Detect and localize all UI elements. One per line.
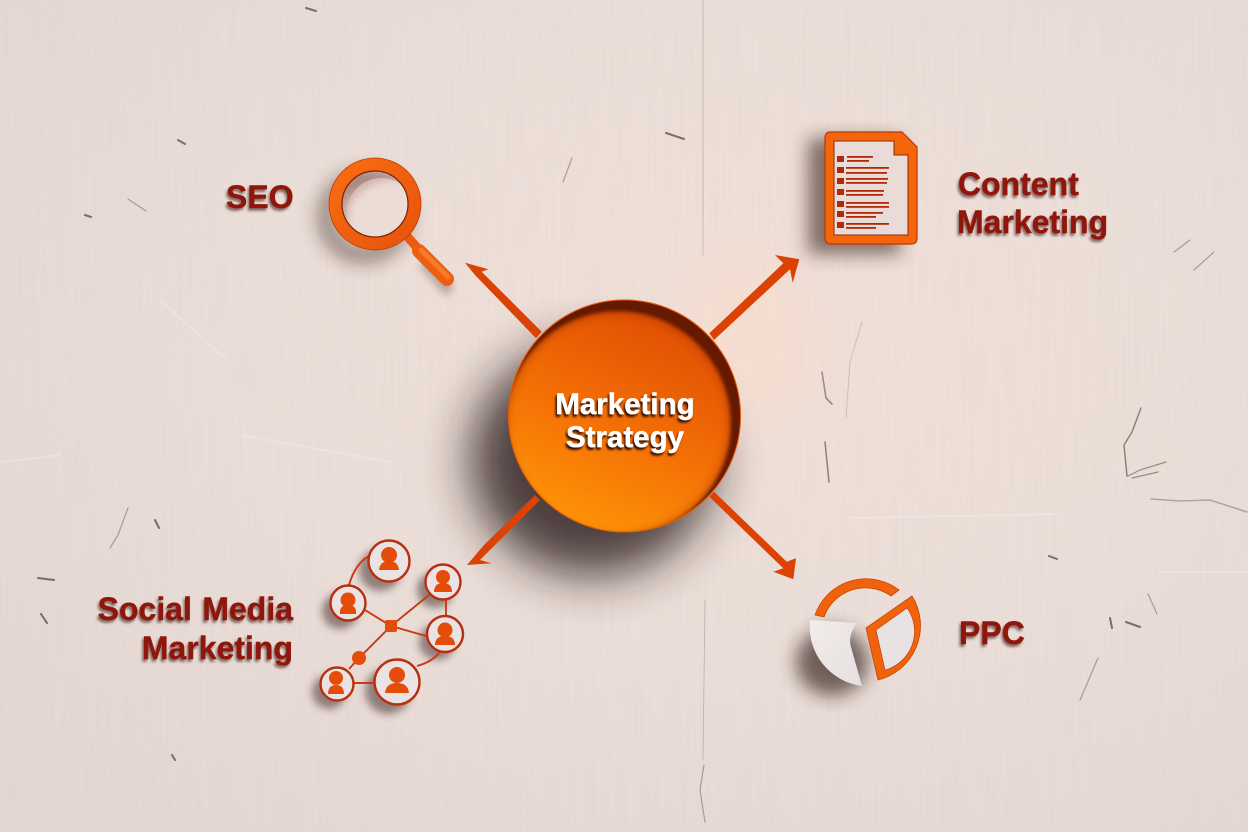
arrow: to SEO [465, 263, 542, 338]
label: Content Marketing [957, 166, 1108, 240]
icon: magnifying glass [326, 158, 450, 292]
label: PPC: PPC [959, 615, 1025, 651]
glow around disc right side [675, 250, 815, 430]
arrow: to Content Marketing [709, 255, 799, 340]
shadow: central disc [470, 344, 714, 576]
label: Social Media Marketing [98, 591, 293, 666]
center label: Marketing [555, 388, 695, 421]
label: SEO: SEO [226, 179, 294, 215]
label: Social Media Marketing: Marketing [142, 630, 293, 666]
icon: social network [312, 540, 463, 714]
label: Content Marketing: Content [958, 166, 1079, 202]
central disc [508, 300, 741, 532]
arrow: to PPC [709, 492, 796, 579]
center label [555, 388, 695, 454]
label: Content Marketing: Marketing [957, 204, 1108, 240]
icon: pie chart [796, 579, 920, 696]
label: Social Media Marketing: Social Media [98, 591, 293, 627]
arrow: to Social Media Marketing [467, 495, 540, 565]
icon: document [808, 132, 917, 254]
center label: Strategy [566, 421, 685, 454]
